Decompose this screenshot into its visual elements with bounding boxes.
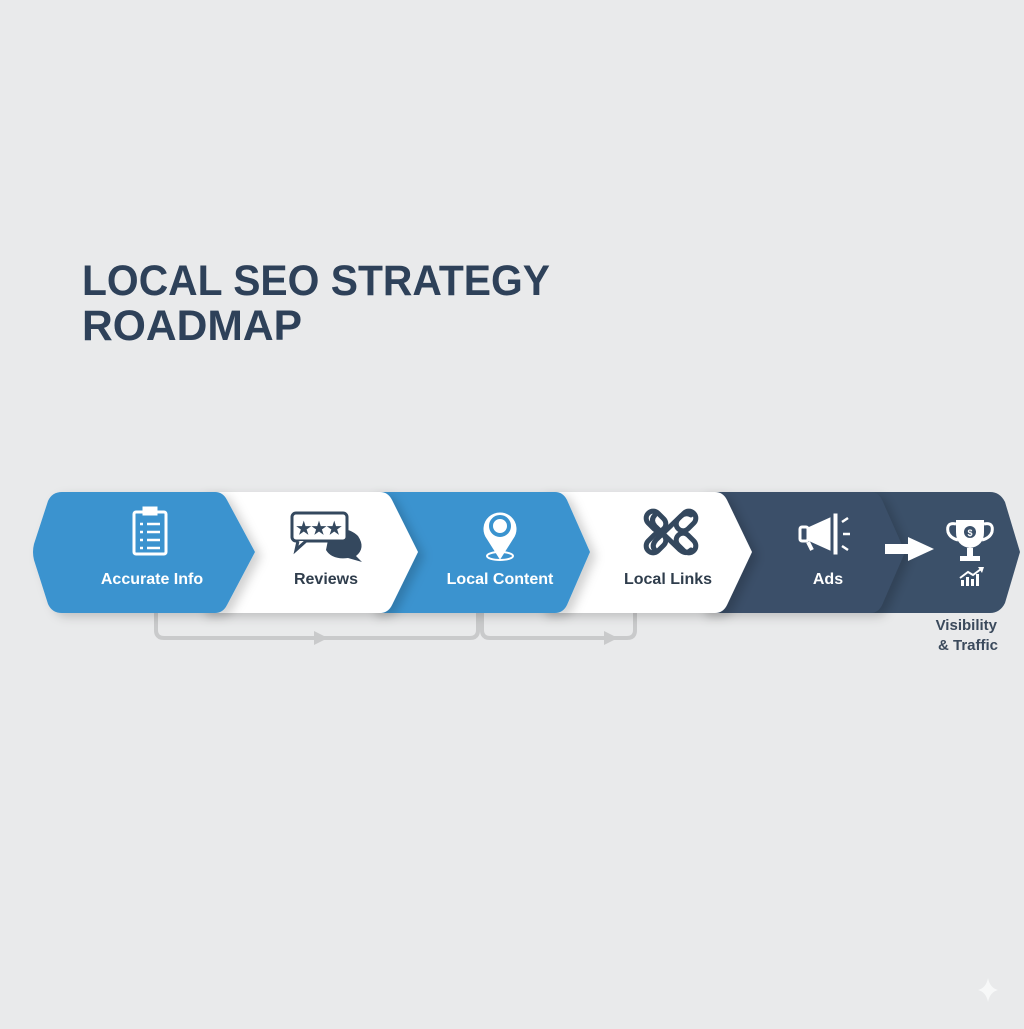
icon: growth chart xyxy=(960,567,984,586)
label: accurate info: Accurate Info xyxy=(101,571,203,588)
label: ads: Ads xyxy=(813,571,843,588)
label: visibility & traffic xyxy=(936,617,998,654)
icon: clipboard xyxy=(134,508,166,554)
label: reviews: Reviews xyxy=(294,571,358,588)
icon: review bubbles: ★★★ xyxy=(296,519,343,538)
icon: trophy xyxy=(948,520,992,561)
roadmap band xyxy=(33,492,1020,613)
title: LOCAL SEO STRATEGY xyxy=(82,257,550,305)
label: visibility & traffic: & Traffic xyxy=(938,637,998,654)
connector lines xyxy=(156,613,635,645)
icon: trophy: $ xyxy=(967,528,973,538)
icon: location pin xyxy=(485,514,515,560)
step 2: reviews xyxy=(200,492,418,613)
icon: megaphone xyxy=(800,514,850,554)
step 6: visibility xyxy=(870,492,1020,613)
icon: chain links xyxy=(643,508,699,556)
icon: review bubbles xyxy=(292,513,362,562)
step 4: local links xyxy=(540,492,752,613)
icon: sparkle xyxy=(978,978,998,1002)
label: local links: Local Links xyxy=(624,571,712,588)
title xyxy=(82,257,550,350)
arrow: to result xyxy=(885,537,934,561)
step 1: accurate info xyxy=(33,492,255,613)
label: local content: Local Content xyxy=(447,571,554,588)
label: visibility & traffic: Visibility xyxy=(936,617,998,634)
step 5: ads xyxy=(700,492,905,613)
step 3: local content xyxy=(370,492,590,613)
title: ROADMAP xyxy=(82,302,302,350)
